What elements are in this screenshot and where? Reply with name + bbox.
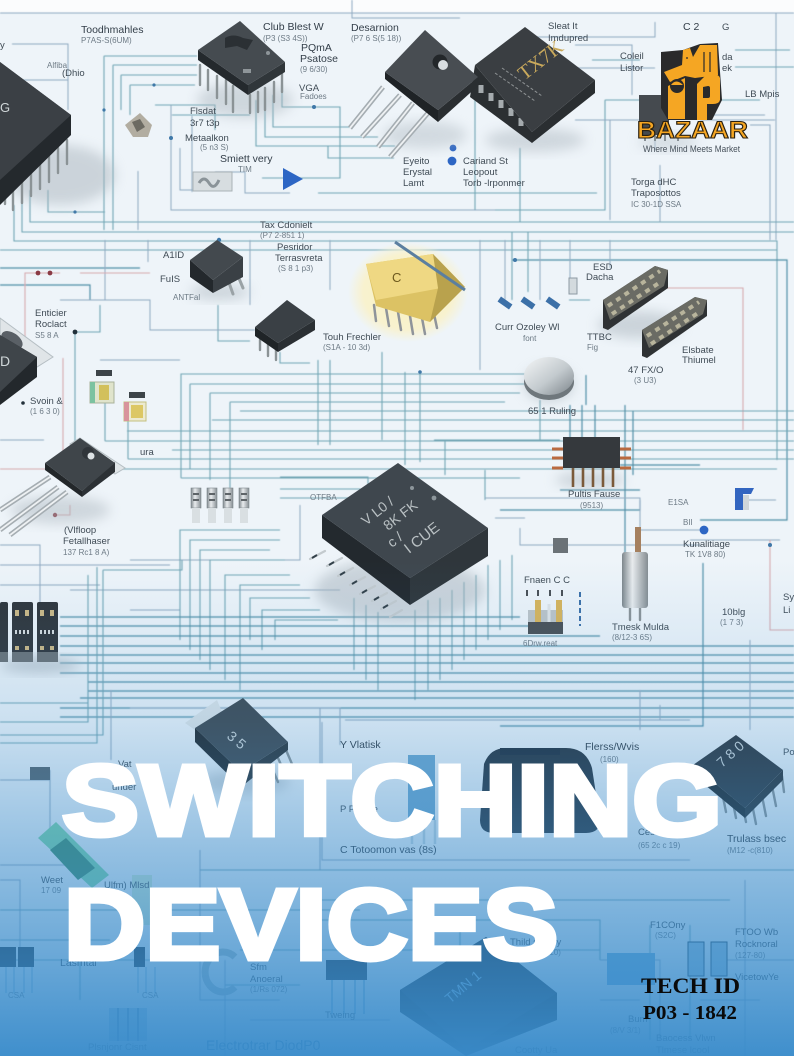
component labels: Leopout xyxy=(463,167,498,178)
chip: club blest xyxy=(197,21,293,118)
component labels: (P7 2-851 1) xyxy=(260,231,305,240)
component labels: Sfm xyxy=(250,962,267,973)
component labels: (127-80) xyxy=(735,951,766,960)
chip: large IC top left xyxy=(0,62,115,210)
component labels: Tax Cdonielt xyxy=(260,220,313,231)
component labels: OTFBA xyxy=(310,493,337,502)
component: dark rounded module xyxy=(480,748,600,833)
component labels: Y Vlatisk xyxy=(340,739,381,751)
component labels: (9 6/30) xyxy=(300,65,328,74)
chip: central main IC: V L0 / xyxy=(358,493,397,528)
fuse xyxy=(132,875,152,925)
chip: lower right IC xyxy=(693,735,784,824)
component labels: VGA xyxy=(299,83,320,94)
tech id xyxy=(641,973,740,1024)
component labels: 47 FX/O xyxy=(628,365,663,376)
component labels: Touh Frechler xyxy=(323,332,381,343)
component labels: (M12 -c(810) xyxy=(727,846,773,855)
component labels: Toodhmahles xyxy=(81,24,143,36)
component labels: (S1A - 10 3d) xyxy=(323,343,370,352)
component labels: 17 09 xyxy=(41,886,62,895)
component labels: IC 30-1D SSA xyxy=(631,200,682,209)
component labels: PQmA xyxy=(301,42,332,54)
component labels: G xyxy=(722,22,729,33)
component: silver disc xyxy=(524,357,574,402)
chip: lower right IC: 7 8 0 xyxy=(713,737,747,770)
chip: tax cdonielt xyxy=(190,240,250,300)
bottom right components xyxy=(607,942,727,985)
component labels: Curr Ozoley Wl xyxy=(495,322,559,333)
component labels: Enticier xyxy=(35,308,67,319)
component labels: Desarnion xyxy=(351,22,399,34)
component labels: S5 8 A xyxy=(35,331,59,340)
chip: labelled IC top xyxy=(470,27,595,152)
small LED modules xyxy=(90,370,146,421)
small grey module xyxy=(193,172,232,191)
component labels: FuIS xyxy=(160,274,180,285)
ring component xyxy=(205,952,235,992)
chip: left edge device: D xyxy=(0,353,10,369)
component labels: Thiumel xyxy=(682,355,716,366)
component labels: (1 6 3 0) xyxy=(30,407,60,416)
connector: blue clip xyxy=(735,488,754,510)
component labels: Fadoes xyxy=(300,92,327,101)
component labels: 137 Rc1 8 A) xyxy=(63,548,110,557)
component labels: (65 2c c 19) xyxy=(638,841,681,850)
component labels: da xyxy=(722,52,733,63)
component labels: Sleat It xyxy=(548,21,578,32)
component labels: Vat xyxy=(118,759,132,770)
component labels: Tweing xyxy=(325,1010,355,1021)
blue fade overlay xyxy=(0,560,794,1056)
component labels: 3r7 t3p xyxy=(190,118,220,129)
component labels: P Pocine xyxy=(340,804,378,815)
component labels: Plsnjonr Cisnt xyxy=(88,1042,147,1053)
bottom relay block xyxy=(109,960,367,1041)
chip: bottom central IC xyxy=(400,937,557,1056)
component labels: (Vlfloop xyxy=(64,525,96,536)
chip: bottom central IC: TMN 1 xyxy=(442,967,484,1006)
component labels: ura xyxy=(140,447,154,458)
component labels: Torb -lrponmer xyxy=(463,178,525,189)
component labels: (P7 6 S(5 18)) xyxy=(351,34,402,43)
component labels: Listor xyxy=(620,63,643,74)
small marker chip xyxy=(30,767,50,780)
component labels: Coleil xyxy=(620,51,644,62)
component labels: Cootty Ua xyxy=(515,1045,558,1056)
small transistor component xyxy=(125,113,152,137)
chip: pesridor xyxy=(255,300,315,360)
component labels: Pultis Fause xyxy=(568,489,620,500)
transistor: large heatsink device xyxy=(350,30,480,157)
component labels: y xyxy=(0,40,5,51)
component labels: CSA xyxy=(142,991,159,1000)
component labels: Dacha xyxy=(586,272,614,283)
chip: labelled IC top: TX7K xyxy=(514,36,568,85)
component labels: under xyxy=(112,782,136,793)
grey square module xyxy=(553,538,568,553)
component labels: 10blg xyxy=(722,607,745,618)
component labels: (d 10) xyxy=(540,948,561,957)
component labels: Tlmese lcool xyxy=(656,1045,709,1056)
component labels: Lamt xyxy=(403,178,424,189)
top white band xyxy=(0,0,794,13)
relay row bottom left xyxy=(0,602,80,673)
component labels: 65 1 Ruling xyxy=(528,406,576,417)
component labels: Cess xyxy=(638,827,660,838)
component: yellow relay: C xyxy=(392,270,401,285)
component labels: Flerss/Wvis xyxy=(585,741,639,753)
component labels: F1COny xyxy=(650,920,686,931)
chip: large IC top left: G xyxy=(0,100,10,115)
cylindrical capacitor xyxy=(622,527,648,620)
component labels: (S 8 1 p3) xyxy=(278,264,313,273)
component labels: Kunalitiage xyxy=(683,539,730,550)
trace junction dots xyxy=(21,83,772,802)
component labels: E1SA xyxy=(668,498,689,507)
resistor row xyxy=(191,488,249,523)
component labels: font xyxy=(523,334,537,343)
logo: IP Bazaar: BAZAAR xyxy=(637,117,748,144)
component labels: (1/Rs 072) xyxy=(250,985,288,994)
component labels: Li xyxy=(783,605,790,616)
chip: central main IC: 8K FK xyxy=(380,496,421,533)
component labels: C 2 xyxy=(683,21,700,33)
switch assembly xyxy=(527,590,580,634)
component labels: (9513) xyxy=(580,501,603,510)
board: green module xyxy=(38,822,109,888)
component labels: (1 7 3) xyxy=(720,618,743,627)
component labels: Rocknoral xyxy=(735,939,778,950)
component labels: Electrotrar DiodP0 xyxy=(206,1037,321,1053)
chip: central main IC: I CUE xyxy=(401,519,443,557)
component labels: (P3 (S3 4S)) xyxy=(263,34,308,43)
component labels: Traposottos xyxy=(631,188,681,199)
component labels: BII xyxy=(683,518,693,527)
component: blue connector xyxy=(408,755,435,844)
component labels: Metaalkon xyxy=(185,133,229,144)
component labels: Fetallhaser xyxy=(63,536,110,547)
icon: buffer triangle xyxy=(283,168,303,190)
component labels: Terrasvreta xyxy=(275,253,323,264)
component labels: (Dhio xyxy=(62,68,85,79)
component labels: (8/12-3 6S) xyxy=(612,633,652,642)
component labels: Trulass bsec xyxy=(727,833,786,845)
component labels: VicetowYe xyxy=(735,972,779,983)
component labels: Bum xyxy=(628,1014,648,1025)
tech id: P03 - 1842 xyxy=(643,1002,737,1024)
component labels: Imdupred xyxy=(548,33,588,44)
component labels: 6Drw.reat xyxy=(523,639,558,648)
chip: pulse fuse xyxy=(552,437,631,488)
component labels: ANTFal xyxy=(173,293,200,302)
component labels: CSA xyxy=(8,991,25,1000)
component labels: LB Mpis xyxy=(745,89,780,100)
component labels: (160) xyxy=(600,755,619,764)
relay blocks xyxy=(598,266,707,358)
component labels: C Totoomon vas (8s) xyxy=(340,844,437,856)
component labels: Anoeral xyxy=(250,974,283,985)
component labels: Torga dHC xyxy=(631,177,677,188)
component labels: TTBC xyxy=(587,332,612,343)
component labels: (8/V 3/1) xyxy=(610,1026,641,1035)
component labels: Elsbate xyxy=(682,345,714,356)
component labels: Cariand St xyxy=(463,156,508,167)
component: yellow relay xyxy=(348,242,468,342)
component labels: Ulfm) Mlsd xyxy=(104,880,149,891)
chip: lower slate IC xyxy=(185,698,292,794)
chip: left edge device xyxy=(0,318,53,405)
component labels: Eyeito xyxy=(403,156,429,167)
tech id: TECH ID xyxy=(641,973,740,998)
component labels: Pesridor xyxy=(277,242,312,253)
transistor: left TO device xyxy=(0,438,125,535)
component labels: Alfiba xyxy=(47,61,68,70)
component labels: Club Blest W xyxy=(263,21,324,33)
bottom transistors xyxy=(0,947,155,993)
component labels: Fig xyxy=(587,343,598,352)
component labels: FTOO Wb xyxy=(735,927,778,938)
component labels: Psatose xyxy=(300,53,338,65)
component labels: Fnaen C C xyxy=(524,575,570,586)
component labels: TK 1V8 80) xyxy=(685,550,726,559)
component labels: Lasmtal xyxy=(60,957,97,969)
component labels: Baocess Vlwn xyxy=(656,1033,716,1044)
chip: central main IC: c / xyxy=(384,529,406,550)
capacitors: curr ozoley xyxy=(498,278,577,309)
component labels: Tmesk Mulda xyxy=(612,622,670,633)
component labels: P7AS-S(6UM) xyxy=(81,36,132,45)
component labels: Thild sletory xyxy=(510,937,561,948)
component labels: Sy xyxy=(783,592,794,603)
component labels: A1ID xyxy=(163,250,184,261)
component labels: ESD xyxy=(593,262,613,273)
component labels: Weet xyxy=(41,875,63,886)
chip: central main IC xyxy=(310,463,488,622)
component labels: TIM xyxy=(238,165,252,174)
title: SWITCHING DEVICES: DEVICES xyxy=(64,869,558,981)
title: SWITCHING DEVICES xyxy=(62,745,722,981)
chip: lower slate IC: 3 5 xyxy=(224,727,249,752)
component labels: Flsdat xyxy=(190,106,216,117)
component labels: Erystal xyxy=(403,167,432,178)
component labels: (3 U3) xyxy=(634,376,657,385)
title: SWITCHING DEVICES: SWITCHING xyxy=(62,745,722,857)
logo: IP Bazaar xyxy=(637,43,748,150)
logo tagline: Where Mind Meets Market xyxy=(643,143,740,154)
component labels: Svoin & xyxy=(30,396,63,407)
component labels: Smiett very xyxy=(220,153,273,165)
component labels: ek xyxy=(722,63,732,74)
component labels: Roclact xyxy=(35,319,67,330)
component labels: (S2C) xyxy=(655,931,676,940)
component labels: (5 n3 S) xyxy=(200,143,229,152)
